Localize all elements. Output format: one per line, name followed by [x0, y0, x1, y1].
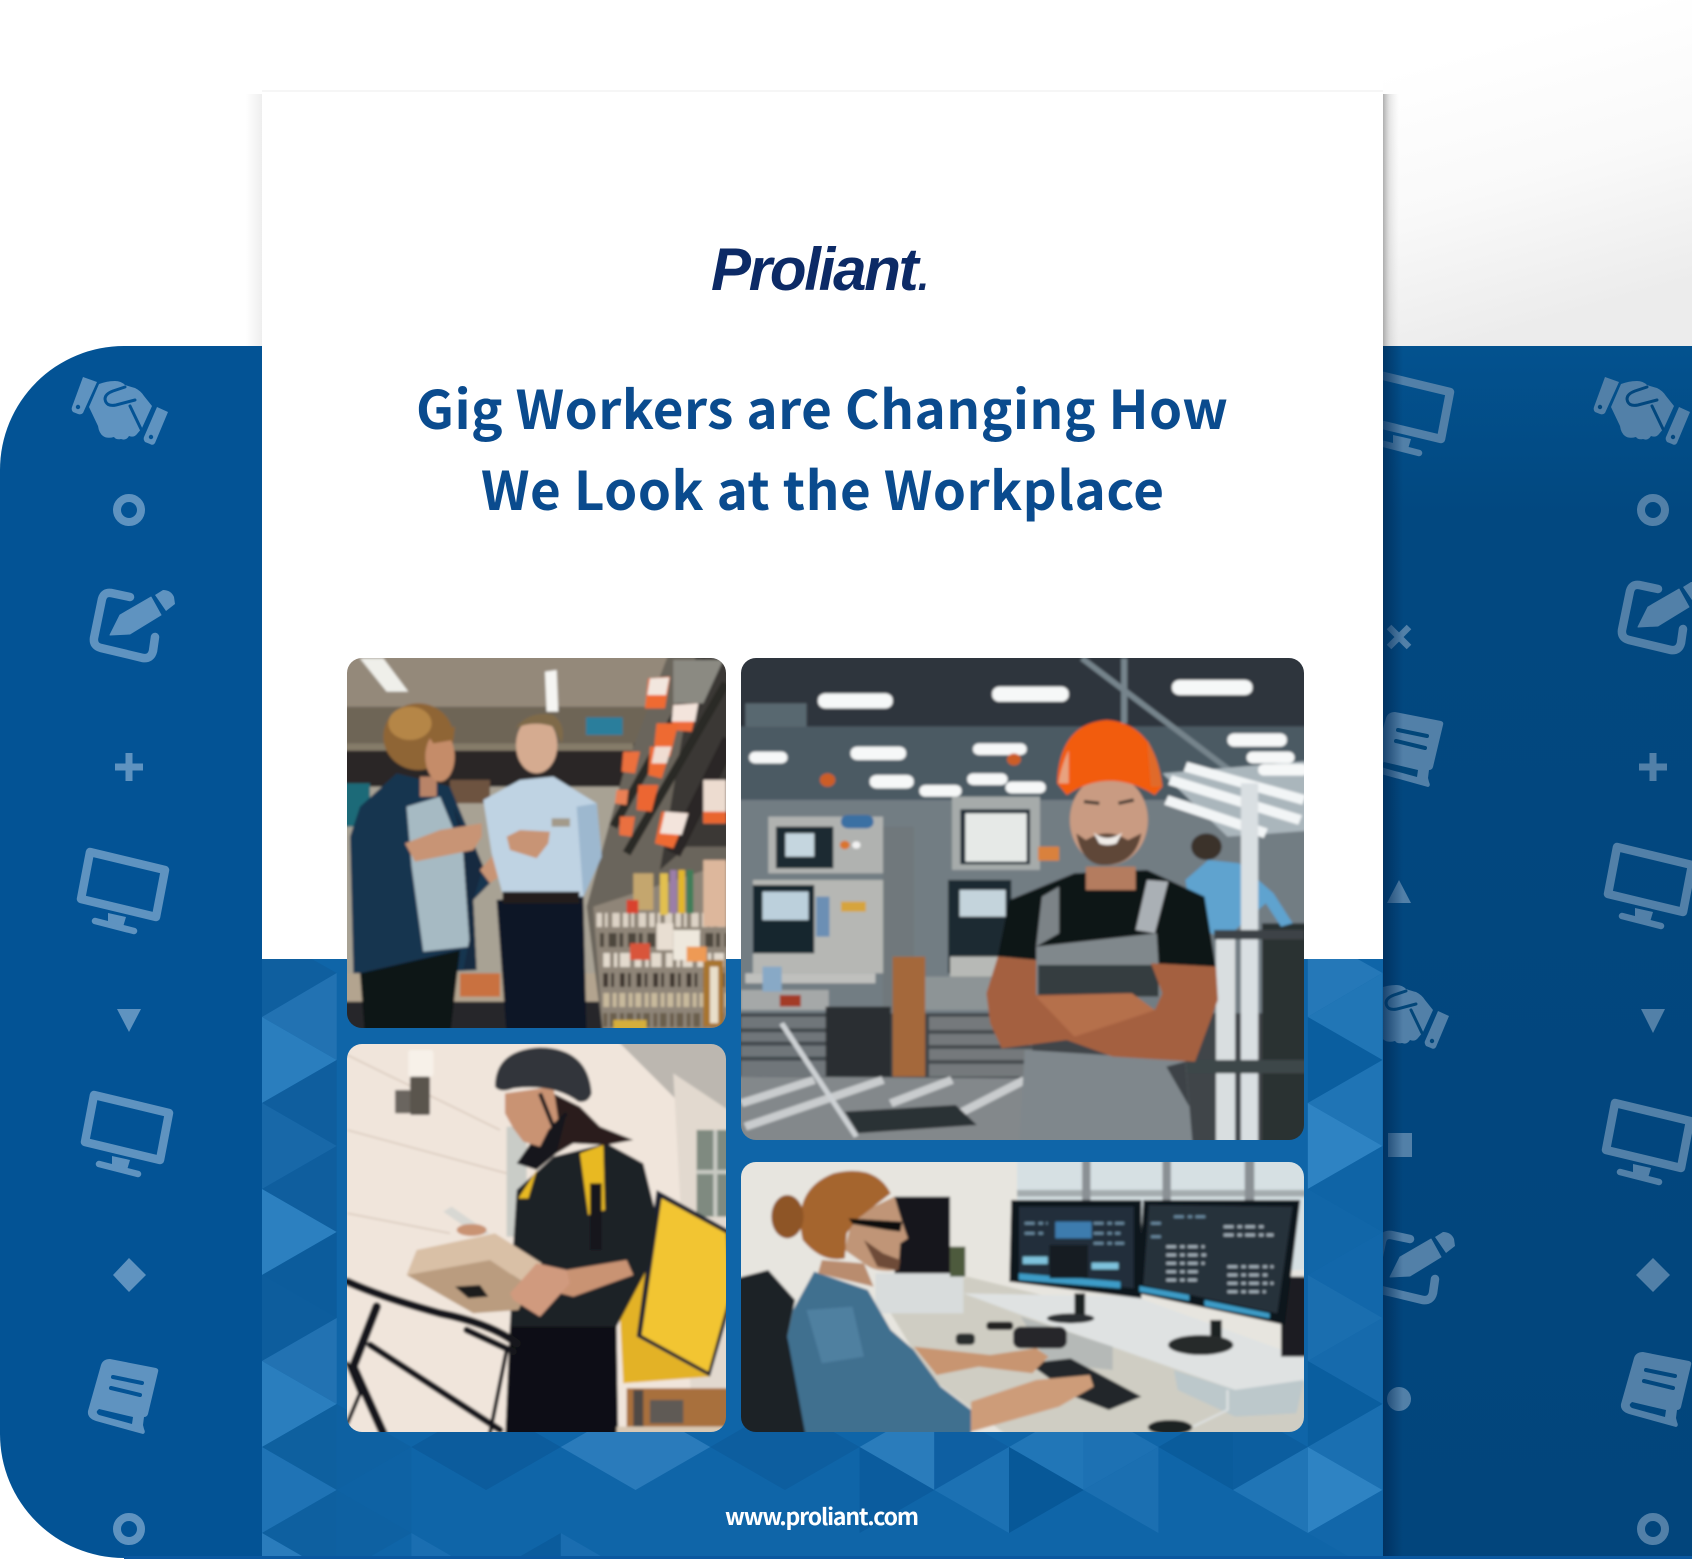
background worker and columns	[1184, 783, 1304, 1140]
price tags	[615, 660, 726, 848]
icon column: middle, partly behind the document	[1353, 374, 1455, 1411]
office chair	[741, 1268, 808, 1432]
title: We Look at the Workplace	[481, 450, 1164, 526]
title	[416, 369, 1228, 526]
parcel and phone	[407, 1207, 570, 1317]
panel: document cover	[262, 346, 1383, 1556]
panel: blue rounded background	[0, 346, 1692, 1559]
icon column: left	[72, 377, 175, 1541]
insulated yellow backpack	[618, 1190, 733, 1383]
wooden bench	[614, 1386, 726, 1432]
store shelves	[586, 658, 726, 1028]
website url: www.proliant.com	[725, 1498, 919, 1532]
metal table and laptop	[730, 1023, 1025, 1150]
riser shelf	[956, 1277, 1319, 1417]
triangle pattern	[262, 931, 1382, 1560]
bicycle	[347, 1282, 517, 1433]
logo: Proliant: Proliant.	[711, 236, 933, 303]
ceiling lights	[749, 680, 1308, 797]
photo: retail workers in a store aisle	[340, 650, 737, 1037]
man in light blue shirt	[483, 714, 602, 1037]
shelving and copper cylinder	[741, 957, 1032, 1077]
document shadow	[246, 90, 1403, 1556]
photo: factory worker in orange hard hat	[730, 650, 1319, 1150]
keyboard and mouse	[1029, 1358, 1228, 1435]
courier	[495, 1047, 657, 1440]
title: Gig Workers are Changing How	[416, 369, 1228, 445]
woman in navy jacket	[348, 702, 498, 1028]
factory worker	[986, 720, 1218, 1150]
machines	[741, 797, 1059, 1013]
wall lamp	[395, 1050, 433, 1115]
dual monitors	[1009, 1200, 1300, 1355]
icon column: right	[1594, 377, 1692, 1541]
photo: delivery courier with parcel and bicycle	[340, 1037, 733, 1440]
photo: software developer at dual monitors	[741, 1162, 1304, 1432]
developer	[771, 1171, 1094, 1440]
